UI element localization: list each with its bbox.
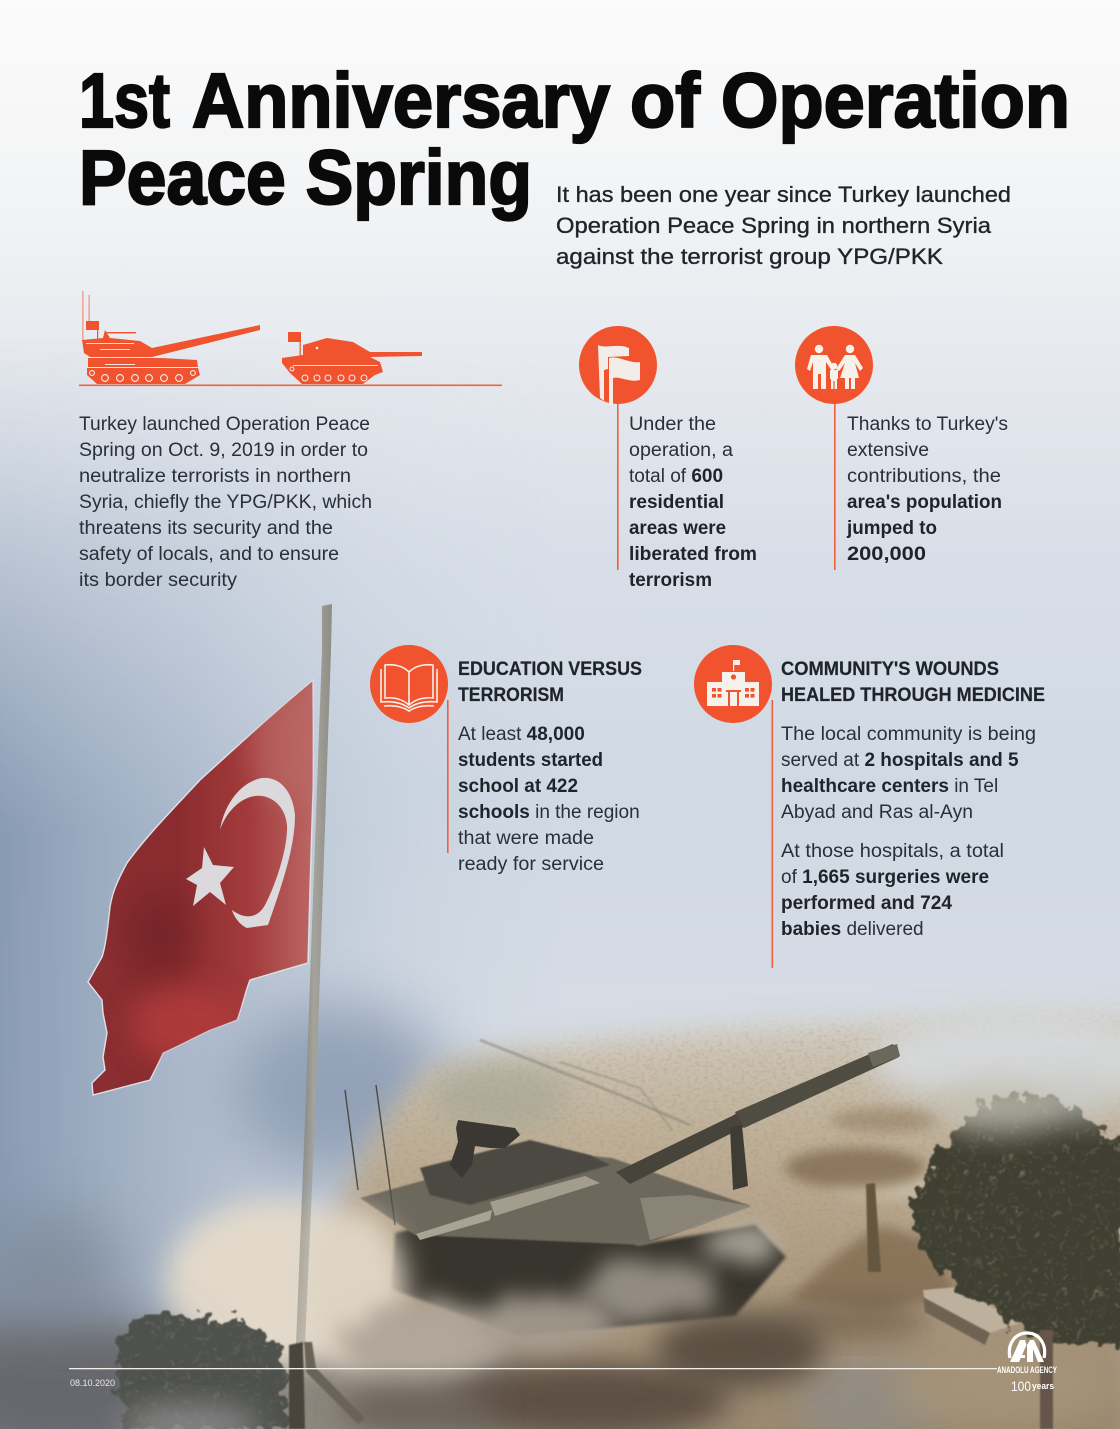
Anadolu Agency logo: 100: [1011, 1378, 1031, 1394]
panel: medicine: performed and 724: [781, 893, 952, 914]
title: Operation: [721, 58, 1070, 144]
panel: medicine: At those hospitals, a total: [781, 841, 1004, 862]
background photo: left tree: [118, 1310, 288, 1429]
panel: residential areas: Under the: [629, 414, 716, 435]
panel: population: extensive: [847, 440, 929, 461]
panel: education: that were made: [458, 828, 594, 849]
panel: residential areas: [579, 326, 757, 591]
icon: school building: [694, 645, 772, 723]
star: [186, 847, 234, 906]
blue haze on the left: [0, 397, 420, 1350]
background photo: terrain: [200, 960, 1120, 1429]
panel: population: 200,000: [847, 544, 926, 565]
background photo: right tree: [912, 1067, 1120, 1429]
Anadolu Agency logo: [997, 1333, 1057, 1394]
icon: battle tank: [282, 332, 422, 384]
intro text block: its border security: [79, 570, 238, 591]
panel: medicine: of 1,665 surgeries were: [781, 867, 989, 888]
intro text block: neutralize terrorists in northern: [79, 466, 351, 487]
panel: education: ready for service: [458, 854, 604, 875]
panel: medicine: babies delivered: [781, 919, 924, 940]
panel: education: schools in the region: [458, 802, 640, 823]
panel: education: school at 422: [458, 776, 578, 797]
icon: book: [370, 645, 448, 723]
Anadolu Agency logo: ANADOLU AGENCY: [997, 1365, 1057, 1375]
background photo: tank: [345, 1044, 900, 1336]
subtitle: against the terrorist group YPG/PKK: [556, 244, 943, 269]
panel: residential areas: total of 600: [629, 466, 723, 487]
panel: medicine: COMMUNITY'S WOUNDS: [781, 659, 999, 680]
title: Anniversary: [192, 58, 610, 144]
panel: residential areas: areas were: [629, 518, 726, 539]
panel: education: At least 48,000: [458, 724, 585, 745]
flagpole: [289, 604, 365, 1429]
intro text block: safety of locals, and to ensure: [79, 544, 339, 565]
panel: medicine: served at 2 hospitals and 5: [781, 750, 1019, 771]
intro text block: [79, 414, 372, 591]
subtitle: [556, 182, 1011, 269]
Anadolu Agency logo: years: [1032, 1381, 1054, 1391]
panel: education: TERRORISM: [458, 685, 564, 706]
panel: population: Thanks to Turkey's: [847, 414, 1008, 435]
title: of: [630, 58, 700, 144]
icon: family: [795, 326, 873, 404]
panel: medicine: Abyad and Ras al-Ayn: [781, 802, 973, 823]
title: 1st: [79, 58, 170, 144]
crescent: [220, 778, 295, 928]
panel: medicine: HEALED THROUGH MEDICINE: [781, 685, 1045, 706]
intro text block: threatens its security and the: [79, 518, 333, 539]
panel: population: area's population: [847, 492, 1002, 513]
panel: education: students started: [458, 750, 603, 771]
background photo: dust and smoke: [0, 1200, 825, 1429]
intro text block: Spring on Oct. 9, 2019 in order to: [79, 440, 368, 461]
intro text block: Turkey launched Operation Peace: [79, 414, 370, 435]
panel: population: contributions, the: [847, 466, 1001, 487]
panel: population: [795, 326, 1008, 570]
panel: education: [370, 645, 642, 875]
Turkish flag: [88, 680, 330, 1095]
lower road shading: [795, 1360, 945, 1429]
panel: residential areas: operation, a: [629, 440, 733, 461]
panel: medicine: The local community is being: [781, 724, 1036, 745]
panel: residential areas: terrorism: [629, 570, 712, 591]
tank icons on baseline: [79, 291, 502, 386]
panel: population: jumped to: [846, 518, 937, 539]
title: [79, 58, 1070, 221]
intro text block: Syria, chiefly the YPG/PKK, which: [79, 492, 372, 513]
subtitle: It has been one year since Turkey launched: [556, 182, 1011, 207]
panel: residential areas: liberated from: [629, 544, 757, 565]
dry grass patches: [785, 1108, 960, 1310]
title: Peace Spring: [79, 135, 532, 221]
icon: flags: [579, 326, 657, 405]
subtitle: Operation Peace Spring in northern Syria: [556, 213, 992, 238]
icon: howitzer: [82, 291, 260, 384]
panel: medicine: healthcare centers in Tel: [781, 776, 998, 797]
panel: education: EDUCATION VERSUS: [458, 659, 642, 680]
footer rule and date: 08.10.2020: [70, 1378, 115, 1388]
panel: medicine: [694, 645, 1045, 968]
panel: residential areas: residential: [629, 492, 724, 513]
